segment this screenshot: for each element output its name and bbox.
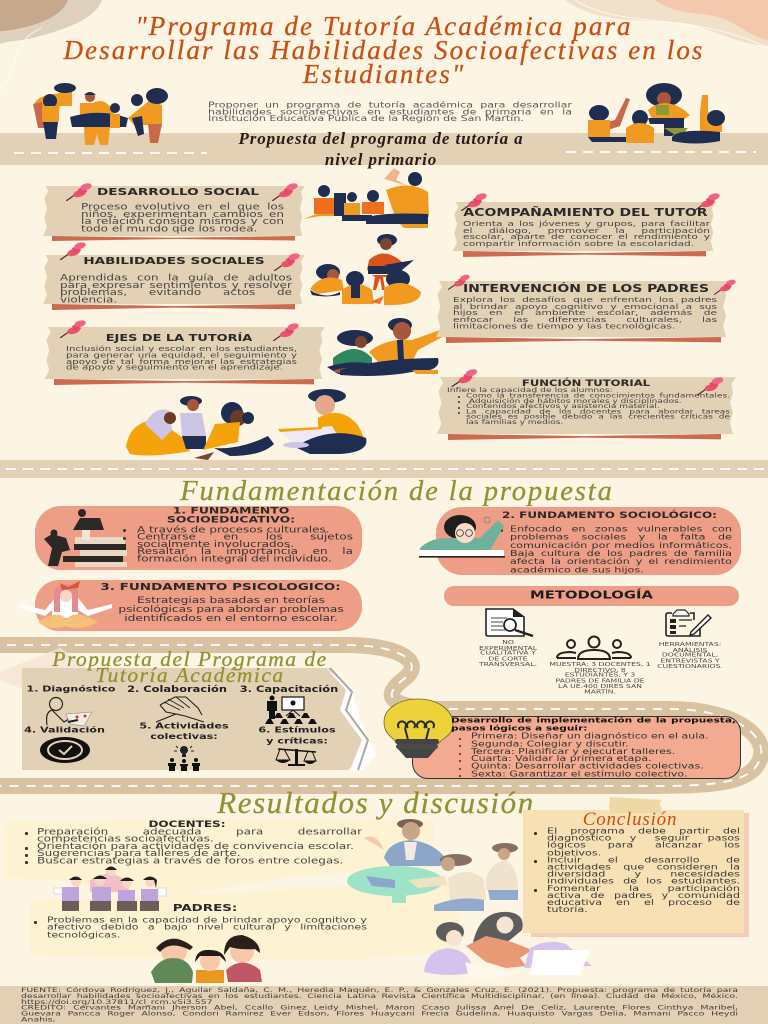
body text: Aprendidas con la guía de adultos [60,273,292,282]
body text: Infiere la capacidad de los alumnos: [447,387,613,394]
body text: para expresar sentimientos y resolver [60,280,292,290]
icon: collective idea [166,744,204,771]
heading: Conclusión [583,809,677,830]
panel: habilidades sociales [43,242,305,310]
body text: Resaltar la importancia en la [137,546,353,556]
illustration: kids with teacher [588,83,725,144]
body text: A través de procesos culturales. [137,525,330,534]
heading text [451,717,736,732]
bullet list: individuales de los estudiantes. [547,877,740,886]
labels row 1: 1. Diagnóstico [27,684,115,694]
text: muestra [549,661,651,695]
heading: EJES DE LA TUTORÍA [106,333,252,344]
bullet list: educativa en el proceso de [547,898,740,907]
credits text: CRÉDITO: Cervantes Mamani Jherson Abel, Ccallo Ginez Leidy Mishel, Maron Ccaso Julissa Anel De Celiz, Laurente Flores Cinthya Maribel, [21,1004,738,1012]
body text: de apoyo y seguimiento en el aprendizaje. [66,364,283,372]
text: enfoque: EXPERIMENTAL [479,645,537,651]
title: "Programa de Tutoría Académica para [135,11,633,41]
heading: HABILIDADES SOCIALES [83,255,265,267]
illustration: worried parents [150,935,264,985]
illustration: parents and children [310,234,421,306]
heading: Tutoría Académica [95,662,285,686]
step list: Quinta: Desarrollar actividades colectivas. [471,762,704,771]
illustration: climbing books [44,509,127,567]
illustration: students [54,866,168,912]
body text [118,595,344,623]
panel: pasos lógicos [384,699,742,781]
step list: Segunda: Colegiar y discutir. [471,739,629,748]
body text: Proceso evolutivo en el que los [81,202,284,211]
heading: resultados: Resultados y discusión [217,785,535,820]
text: enfoque [478,639,537,667]
heading: PADRES: [173,903,237,914]
heading: FUNCIÓN TUTORIAL [522,378,650,388]
pin [461,193,487,211]
body text: limitaciones de tiempo y las tecnológicas. [453,322,675,331]
credits text [21,988,738,1023]
bullet list: Sugerencias para talleres de arte. [37,848,241,858]
text: herramientas [657,641,723,669]
body text: escolar, aparte de conocer el rendimiento y [463,233,710,241]
steps box [412,716,741,779]
highlight patches [0,815,540,975]
heading [52,647,328,686]
heading: 2. FUNDAMENTO SOCIOLÓGICO: [502,510,717,520]
bullet list: Contenidos afectivos y asistencia material. [466,403,660,410]
text: muestra: PADRES DE FAMILIA DE [556,677,644,684]
bullet list: actividades que consideren la [547,862,740,871]
illustration: man and child pointing [327,318,442,376]
body text: socialmente involucrados. [137,539,294,549]
bullet list: las familias y medios. [466,419,563,426]
bullet list [37,828,362,864]
text: herramientas: ENTREVISTAS Y [660,657,720,664]
panel background [0,648,376,770]
heading: INTERVENCIÓN DE LOS PADRES [463,283,709,295]
body text: psicológicas para abordar problemas [118,604,344,614]
heading: DOCENTES: [148,819,226,829]
panel: intervención de los padres [436,274,736,343]
heading text: pasos lógicos a seguir: [451,724,588,732]
bullet [500,529,503,532]
text: herramientas: CUESTIONARIOS. [657,663,723,669]
subheading [238,129,524,169]
body text: afecta la orientación y el rendimiento [510,557,732,566]
body text: el diálogo, promover la participación [463,226,710,235]
pin [66,183,92,201]
text: enfoque: NO [502,639,514,646]
panel: desarrollo social [43,183,305,241]
subheading: Propuesta del programa de tutoría a [238,129,524,148]
icon: handshake [156,696,204,722]
illustration: girl with glasses reading [419,515,505,558]
shadow [531,813,749,937]
panel: propuesta del programa: 2. Colaboración [127,684,227,694]
icon: scales [276,747,318,767]
bullet text: tecnológicas. [47,930,120,939]
body text: niños, experimentan cambios en [81,209,284,219]
text: muestra: DIRECTIVO, 8 [574,667,626,673]
pin [60,242,86,260]
text: docentes [20,818,370,868]
body text: compartir información sobre la escolaridad. [463,240,694,248]
heading: Propuesta del Programa de [52,647,328,671]
icon: presentation audience [262,696,326,726]
body text: la relación consigo mismos y con [81,216,284,226]
body text: enfocar las diferencias culturales, las [453,316,717,324]
body text: problemas sociales y la falta de [510,533,732,542]
panel: propuesta del programa: 6. Estímulos [258,725,336,735]
pin [451,369,478,387]
body text: Orienta a los jóvenes y grupos, para facilitar [463,220,710,228]
list bullets [459,738,461,740]
bullet list: Preparación adecuada para desarrollar [37,827,362,836]
tape [609,797,662,813]
bullet list: La capacidad de los docentes para abordar tareas [466,408,730,415]
title: Desarrollar las Habilidades Socioafectivas en los [63,35,705,65]
text: enfoque: CUALITATIVA Y [480,650,536,656]
text: muestra: ESTUDIANTES, Y 3 [565,672,635,678]
text: muestra: MUESTRA: 3 DOCENTES, 1 [549,661,651,668]
step list: Cuarta: Validar la primera etapa. [471,754,652,763]
panel: función tutorial [437,369,736,440]
bullet list: Adquisición de hábitos morales y disciplinados. [469,397,682,404]
body text: al brindar apoyo cognitivo y emocional a sus [453,302,717,311]
footer band [0,986,768,1024]
body text [463,220,710,248]
bullet list: Incluir el desarrollo de [547,855,740,864]
text: padres [30,902,370,942]
body text: hijos en el ambiente escolar, además de [453,309,717,317]
bullet list: Buscar estrategias a través de foros entre colegas. [37,856,343,866]
body text: Explora los desafíos que enfrentan los padres [453,296,717,304]
heading: DESARROLLO SOCIAL [97,186,259,198]
panel: metodología [444,586,739,606]
panel: propuesta del programa: y críticas: [266,736,328,745]
illustration: meditating woman [20,581,112,628]
body text: Inclusión social y escolar en los estudiantes, [66,346,297,353]
bullet list: activa de padres y comunidad [547,891,740,900]
panel: fundamento sociológico [436,507,741,575]
card [523,810,744,933]
panel: propuesta del programa: 5. Actividades [139,721,229,731]
step list: Primera: Diseñar un diagnóstico en el aula. [471,732,709,741]
body text: Centrarse en los sujetos [137,532,353,542]
panel: ejes de la tutoría [45,320,325,385]
icon: clipboard checklist [665,609,712,637]
body text: Enfocado en zonas vulnerables con [510,524,732,533]
text: muestra: LA UE.400 DIRES SAN [558,683,642,689]
credits text: desarrollar habilidades socioafectivas en los estudiantes. Ciencia Latina Revista Científica Multidisciplinar, (en línea). Ciudad de México, México. [21,992,738,1000]
panel: conclusión [523,797,749,937]
bullet list: sociales es posible debido a las crecientes críticas de [466,413,730,420]
bullet list [547,828,740,914]
heading: METODOLOGÍA [530,589,653,601]
bullet list: tutoría. [547,905,588,914]
body text: Baja cultura de los padres de familia [510,549,732,558]
body text: para generar una equidad, el seguimiento y [66,352,297,359]
body text [453,296,717,331]
bullet list: diagnóstico y seguir pasos [547,834,740,843]
icon: diagnosis person [46,696,92,726]
step list: Sexta: Garantizar el estímulo colectivo. [471,769,687,778]
heading [167,505,295,525]
text: enfoque: TRANSVERSAL. [479,661,537,667]
body text: Estrategias basadas en teorías [137,595,325,605]
illustration: group holding hands [33,83,168,145]
icon: light bulb [384,699,454,759]
body text [81,202,284,234]
panel: fundamento socioeducativo [35,506,362,570]
bullet list: Orientación para actividades de convivencia escolar. [37,841,354,851]
bullet list: Como la transferencia de conocimientos fundamentales. [466,392,730,399]
bullet list: El programa debe partir del [547,827,740,836]
heading: fundamentación: Fundamentación de la propuesta [180,476,614,507]
icon: people group [556,636,632,660]
icon: document magnifier [485,608,534,638]
illustration: teacher meeting around table [345,818,521,913]
icon: validation badge [40,737,91,764]
intro text: Institución Educativa Pública de la Región de San Martín. [208,114,524,123]
heading: 3. FUNDAMENTO PSICOLOGICO: [100,581,341,593]
subheading: nivel primario [325,150,437,169]
body text: académico de sus hijos. [510,566,644,575]
step list [471,733,736,778]
intro text: Proponer un programa de tutoría académica para desarrollar [208,101,572,110]
panel: acompañamiento del tutor [453,193,720,257]
text: herramientas: DOCUMENTAL, [662,652,718,658]
credits text: Anahis, [21,1016,56,1024]
illustration: family reading together [126,389,366,460]
credits text: https://doi.org/10.37811/cl_rcm.v5i3.557 [21,998,213,1006]
credits text: FUENTE: Córdova Rodríguez, J., Aguilar Saldaña, C. M., Heredia Maquén, E. P., & Gonzales Cruz, E. (2021). Propuesta: programa de tutoría para [21,987,738,994]
heading: ACOMPAÑAMIENTO DEL TUTOR [463,207,708,219]
step list: Tercera: Planificar y ejecutar talleres. [471,747,675,756]
title [63,11,705,89]
body text [510,524,732,575]
intro text: habilidades socioafectivas en estudiantes de primaria en la [208,107,572,116]
illustration: student group with laptop [422,910,594,980]
bullet list: Fomentar la participación [547,884,740,893]
body text: problemas, evitando actos de [60,287,292,297]
bullet text: afectivo debido a bajo nivel cultural y limitaciones [47,923,367,932]
body text [137,525,353,564]
text: enfoque: DE CORTE [488,655,527,662]
body text [60,273,292,304]
heading: 1. FUNDAMENTO [173,505,289,516]
panel: propuesta del programa [0,647,376,770]
panel: propuesta del programa: colectivas: [150,731,218,741]
heading: SOCIOEDUCATIVO: [167,514,295,525]
body text: comunicación por medios informáticos. [510,541,732,550]
body text: todo el mundo que los rodea. [81,224,257,233]
heading text: Desarrollo de implementación de la propuesta, [451,716,736,725]
labels row 2: 4. Validación [24,725,105,735]
body text: violencia. [60,295,117,304]
bullet text [47,917,367,939]
title: Estudiantes" [303,59,465,89]
pin [448,274,470,290]
text: herramientas: ANÁLISIS [673,647,707,653]
text: herramientas: HERRAMIENTAS: [659,641,721,648]
body text [66,345,297,372]
body text: formación integral del individuo. [137,554,332,564]
bullet list: objetivos. [547,848,601,857]
bullet list: diversidad y necesidades [547,869,740,879]
body text: apoyo de tal forma mejorar las estrategias [66,358,297,366]
background blobs [0,0,768,90]
panel: fundamento psicológico [35,580,362,631]
panel: propuesta del programa: 3. Capacitación [240,684,338,694]
pin [60,320,86,338]
credits text: Guevara Pancca Roger Alonso, Condori Ramirez Ever Edson, Flores Huaycani Frecia Gudelina, Huaquisto Vargas Delia, Mamani Pacco Heydi [21,1010,738,1018]
illustration: man with children stretching [303,168,429,228]
body text: identificados en el entorno escolar. [124,614,338,623]
bullet list: competencias socioafectivas. [37,834,214,844]
text: muestra: MARTÍN. [584,688,616,695]
bullet list [466,392,730,426]
intro text [208,101,572,123]
bullet text: Problemas en la capacidad de brindar apoyo cognitivo y [47,916,367,925]
bullet list: lógicos para alcanzar los [547,841,740,850]
